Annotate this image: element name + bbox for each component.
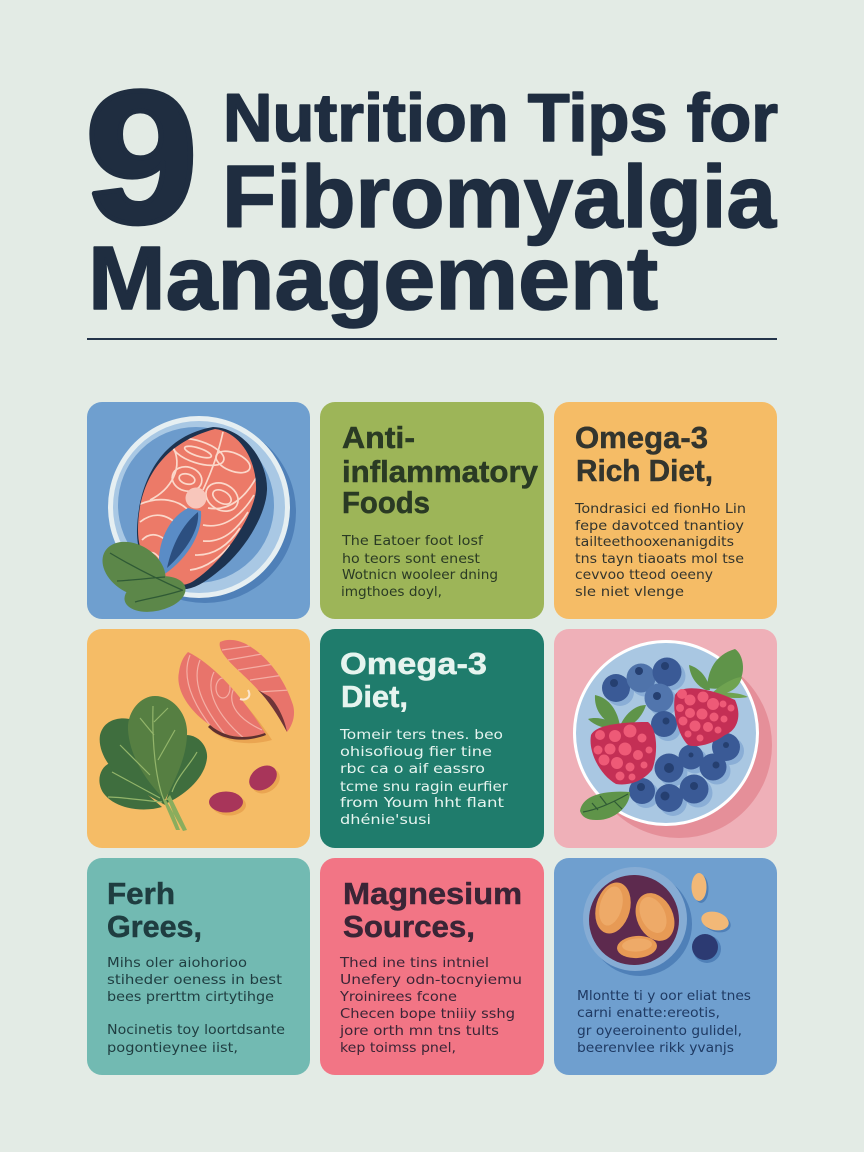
icon: left raspberry [588, 695, 656, 784]
body text [341, 533, 498, 600]
icon: fin [159, 508, 201, 577]
heading [343, 877, 522, 944]
panel: anti-inflammatory foods [320, 402, 544, 619]
panel: almonds illustration [554, 858, 777, 1075]
heading [575, 421, 713, 488]
icon: loose almonds and blueberry [692, 873, 733, 963]
body text: Mlontte ti y oor eliat tnes [577, 988, 751, 1004]
icon: salmon steak [137, 427, 267, 589]
body text: ho teors sont enest [342, 551, 480, 567]
body text: dhénie'susi [340, 812, 431, 828]
icon: leaf [580, 792, 630, 820]
panel: salmon and spinach illustration [87, 629, 310, 848]
heading: Rich Diet, [576, 454, 713, 488]
icon: salmon slices [178, 640, 294, 743]
body text: tns tayn tiaoats mol tse [575, 551, 744, 567]
body text: Tondrasici ed fionHo Lin [574, 501, 746, 517]
title [85, 52, 778, 329]
body text: Checen bope tniiiy sshg [340, 1006, 515, 1022]
panel: omega-3 diet [320, 629, 544, 848]
heading: Sources, [343, 910, 475, 944]
body text: The Eatoer foot losf [341, 533, 484, 549]
body text: kep toimss pnel, [340, 1040, 456, 1056]
heading: Omega-3 [340, 647, 487, 681]
icon: bowl of almonds [583, 867, 692, 976]
body text: Wotnicn wooleer dning [342, 567, 498, 583]
panel: salmon illustration [87, 402, 310, 619]
body text: jore orth mn tns tults [339, 1023, 499, 1039]
body text: tcme snu ragin eurfier [340, 779, 508, 795]
body text: Tomeir ters tnes. beo [339, 727, 503, 743]
title line: Nutrition Tips for: Nutrition Tips for [223, 80, 778, 156]
icon: spinach leaves [99, 696, 207, 831]
body text: gr oyeeroinento gulidel, [577, 1023, 742, 1039]
icon: spinach leaves [92, 531, 189, 617]
body text: Nocinetis toy loortdsante [107, 1022, 285, 1038]
body text [577, 988, 751, 1056]
body text: rbc ca o aif eassro [340, 761, 485, 777]
heading: Anti- [342, 421, 415, 455]
body text: fepe davotced tnantioy [575, 518, 744, 534]
heading [342, 421, 538, 520]
icon: blueberries [602, 658, 744, 816]
title line: Management: Management [88, 229, 658, 329]
body text: carni enatte:ereotis, [577, 1005, 720, 1021]
heading: Diet, [341, 680, 408, 714]
body text: Unefery odn-tocnyiemu [340, 972, 522, 988]
panel: fresh greens [87, 858, 310, 1075]
body text [107, 955, 285, 1056]
body text: beerenvlee rikk yvanjs [577, 1040, 734, 1056]
body text: Yroinirees fcone [339, 989, 457, 1005]
body text: imgthoes doyl, [341, 584, 442, 600]
body text: stiheder oeness in best [107, 972, 282, 988]
title numeral 9: 9 [85, 52, 198, 262]
heading: Magnesium [343, 877, 522, 911]
heading: Ferh [107, 877, 175, 911]
icon: right raspberry [674, 649, 748, 746]
title line: Fibromyalgia: Fibromyalgia [222, 147, 777, 246]
heading: Grees, [107, 910, 202, 944]
body text: Mihs oler aiohorioo [107, 955, 247, 971]
body text [339, 727, 508, 828]
body text: sle niet vlenge [575, 584, 684, 600]
body text: pogontieynee iist, [107, 1040, 238, 1056]
body text [339, 955, 522, 1056]
panel: magnesium sources [320, 858, 544, 1075]
heading: Omega-3 [575, 421, 708, 455]
panel: omega-3 rich diet [554, 402, 777, 619]
heading [107, 877, 202, 944]
body text: tailteethooxenanigdits [575, 534, 734, 550]
body text: bees prerttm cirtytihge [107, 989, 274, 1005]
body text [574, 501, 746, 600]
body text: from Youm hht flant [340, 795, 504, 811]
body text: ohisofioug fier tine [340, 744, 492, 760]
panel: berries illustration [554, 629, 777, 848]
body text: cevvoo tteod oeeny [575, 567, 713, 583]
body text: Thed ine tins intniel [339, 955, 489, 971]
icon: red beans [209, 760, 285, 816]
heading: inflammatory [342, 455, 538, 489]
heading [340, 647, 487, 714]
heading: Foods [342, 486, 430, 520]
